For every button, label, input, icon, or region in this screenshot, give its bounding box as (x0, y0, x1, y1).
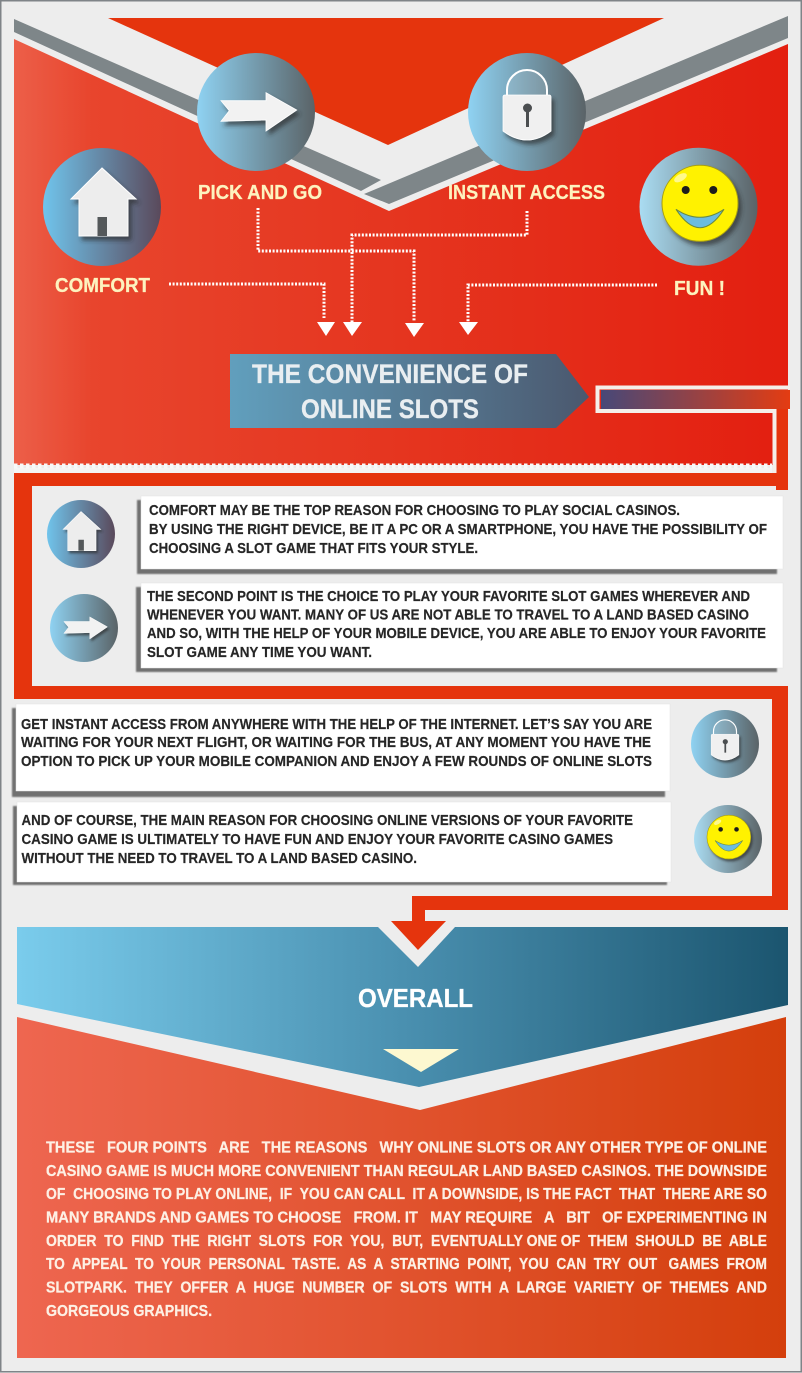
card: instant access text: OPTION TO PICK UP YOUR MOBILE COMPANION AND ENJOY A FEW ROUNDS OF ONLINE SLOTS (21, 753, 652, 770)
red connector path from title to overall section (14, 405, 788, 924)
cream triangle (383, 1049, 459, 1072)
card: comfort text (137, 496, 783, 574)
dotted line: fun (468, 285, 657, 322)
title connector bar (598, 388, 790, 473)
icon: smiley (fun) (640, 148, 758, 266)
panel: summary text: GORGEOUS GRAPHICS. (46, 1303, 212, 1320)
main red panel (14, 39, 788, 465)
panel: summary text (17, 1017, 786, 1358)
label: fun: FUN ! (674, 278, 725, 300)
title banner: ONLINE SLOTS (301, 394, 479, 424)
card: second point text: SLOT GAME ANY TIME YOU WANT. (147, 644, 372, 661)
label: comfort: COMFORT (55, 275, 150, 297)
dashed panel edge (14, 466, 772, 473)
card: instant access text (12, 704, 670, 797)
card: comfort text: COMFORT MAY BE THE TOP REASON FOR CHOOSING TO PLAY SOCIAL CASINOS. (149, 502, 680, 519)
label: instant access: INSTANT ACCESS (448, 182, 605, 204)
small icon: house (47, 500, 115, 568)
card: fun text: WITHOUT THE NEED TO TRAVEL TO A LAND BASED CASINO. (22, 850, 417, 867)
right gray chevron band (364, 16, 788, 204)
card: second point text (136, 583, 783, 672)
icon: house (comfort) (43, 148, 161, 266)
label: pick and go: PICK AND GO (198, 182, 322, 204)
small icon: padlock (691, 710, 759, 778)
title banner (230, 354, 589, 428)
panel: summary text: THESE FOUR POINTS ARE THE REASONS WHY ONLINE SLOTS OR ANY OTHER TYPE OF ONLINE (46, 1140, 767, 1157)
red arrowhead into overall banner (391, 921, 446, 950)
dotted line: instant access (352, 211, 527, 322)
small icon: smiley (694, 805, 762, 873)
panel: summary text: CASINO GAME IS MUCH MORE CONVENIENT THAN REGULAR LAND BASED CASINOS. THE DOWNSIDE (46, 1163, 767, 1180)
panel: overall banner (17, 927, 788, 1087)
dotted line: comfort (169, 284, 324, 318)
card: instant access text: WAITING FOR YOUR NEXT FLIGHT, OR WAITING FOR THE BUS, AT ANY MOMENT YOU HAVE THE (21, 734, 651, 751)
small icon: arrow (50, 594, 118, 662)
icon: padlock (instant access) (468, 53, 586, 171)
card: comfort text: CHOOSING A SLOT GAME THAT FITS YOUR STYLE. (149, 540, 478, 557)
arrowheads (317, 322, 478, 337)
dotted line: pick and go (258, 208, 414, 322)
card: instant access text: GET INSTANT ACCESS FROM ANYWHERE WITH THE HELP OF THE INTERNET. LET’S SAY YOU ARE (21, 716, 652, 733)
icon: arrow (pick and go) (197, 53, 315, 171)
card: fun text: CASINO GAME IS ULTIMATELY TO HAVE FUN AND ENJOY YOUR FAVORITE CASINO GAMES (22, 831, 613, 848)
heading: overall: OVERALL (358, 983, 473, 1013)
left gray chevron band (14, 19, 381, 191)
card: fun text: AND OF COURSE, THE MAIN REASON FOR CHOOSING ONLINE VERSIONS OF YOUR FAVORITE (22, 812, 633, 829)
top red triangle (108, 18, 664, 145)
title banner: THE CONVENIENCE OF (252, 359, 528, 389)
panel: summary text: MANY BRANDS AND GAMES TO CHOOSE FROM. IT MAY REQUIRE A BIT OF EXPERIMENTING IN (46, 1210, 767, 1227)
card: fun text (13, 802, 671, 885)
